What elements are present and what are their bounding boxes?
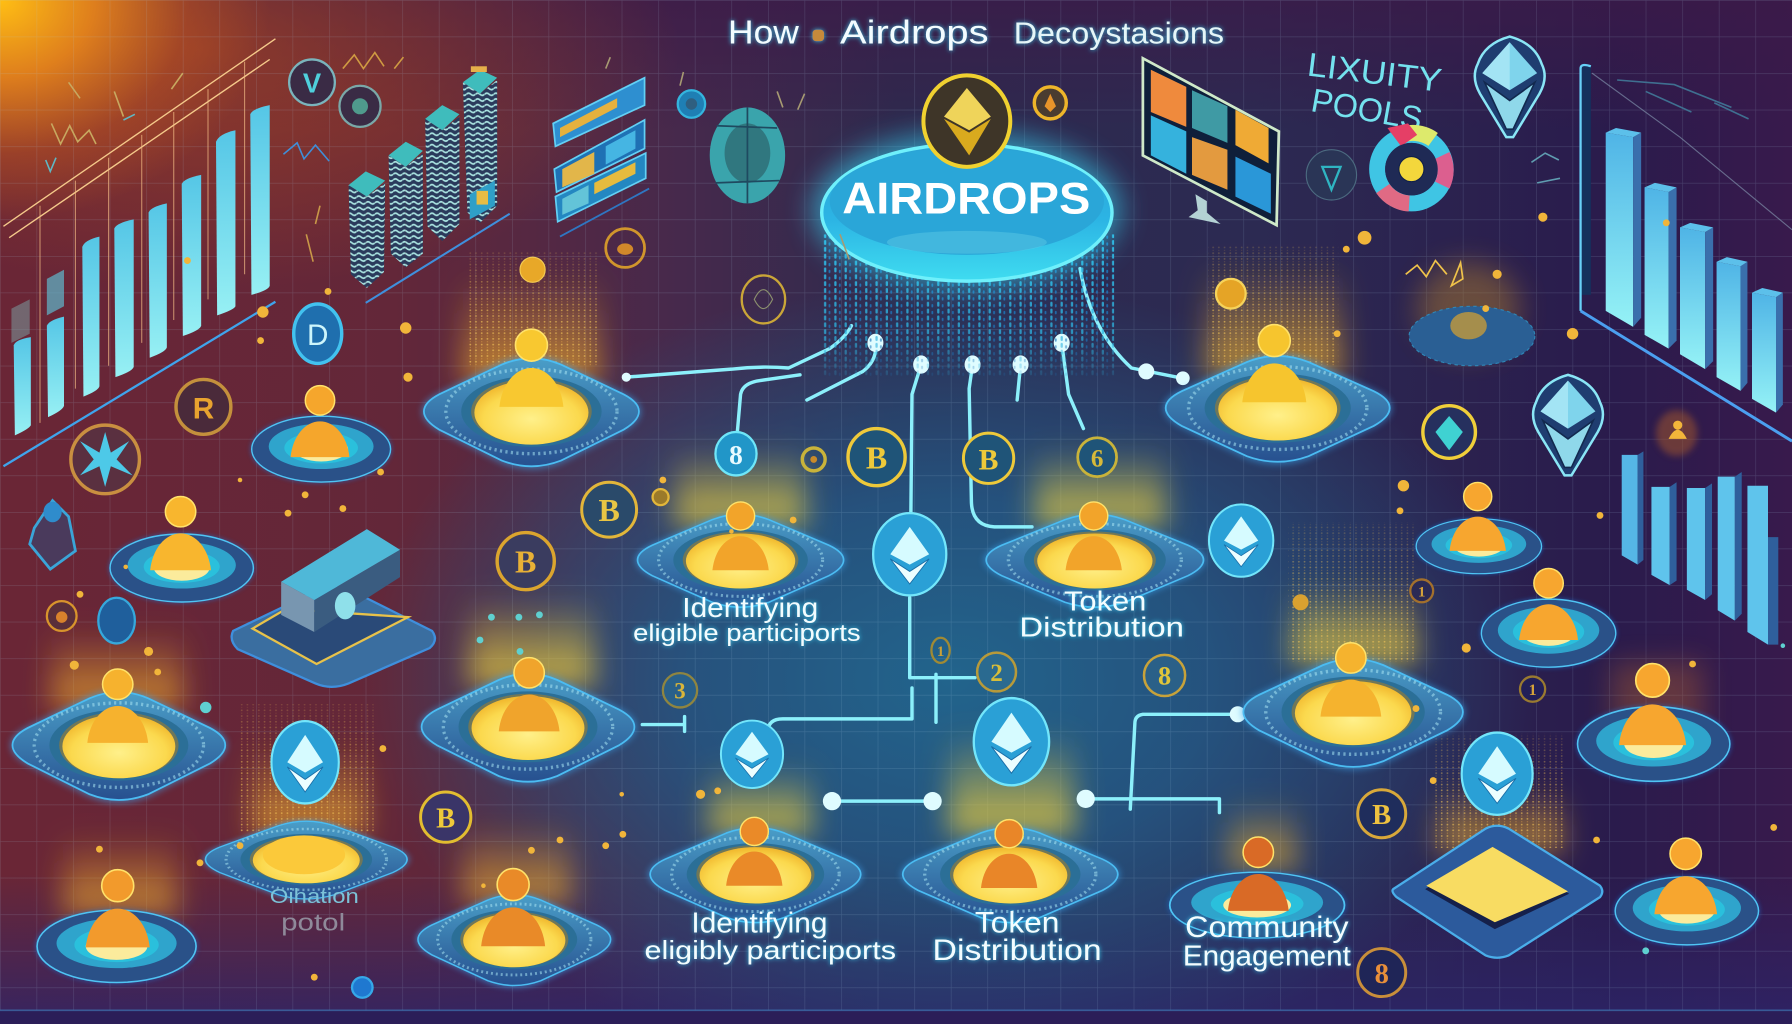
coin: star badge xyxy=(71,425,139,494)
ring pad xyxy=(1415,482,1543,575)
coin xyxy=(1410,579,1433,602)
label: token distribution upper: Distribution xyxy=(1019,612,1184,643)
label: token distribution upper: Token xyxy=(1064,585,1146,616)
coin: ring v xyxy=(289,59,335,105)
coin small: 1 xyxy=(937,644,944,660)
coin: B xyxy=(436,803,455,834)
ring pad xyxy=(250,386,392,483)
coin: ring flower xyxy=(339,86,381,127)
gem xyxy=(873,513,946,595)
coin: hollow 2 xyxy=(742,275,785,323)
label: identifying eligible participants upper: eligible particiports xyxy=(633,620,861,647)
bar chart: right falling bars xyxy=(1581,65,1792,441)
participant pad 2 xyxy=(1163,325,1392,465)
gem tokens xyxy=(271,504,1533,815)
participant pad xyxy=(1241,643,1465,770)
label: community engagement: Community xyxy=(1185,911,1349,944)
label: oihation pool: Oihation xyxy=(270,885,359,908)
pad: gold square xyxy=(1392,826,1602,958)
coin small xyxy=(653,489,669,505)
coin xyxy=(1358,790,1406,838)
coin: hollow xyxy=(606,229,645,267)
coin: P: R xyxy=(193,392,214,425)
coins top xyxy=(289,59,1066,323)
disc title: AIRDROPS xyxy=(842,175,1090,224)
gold coin in curtain right xyxy=(1216,279,1246,309)
label: community engagement xyxy=(1183,911,1351,973)
title: Decoystasions xyxy=(1014,15,1224,50)
label: oihation pool xyxy=(270,885,359,936)
coin 8 xyxy=(1144,655,1185,696)
participant pad: identifying xyxy=(635,502,846,610)
ring pad xyxy=(416,869,613,988)
icon: dim token xyxy=(1306,150,1357,200)
coin xyxy=(497,533,554,590)
title xyxy=(728,14,1224,51)
coin: B xyxy=(979,445,998,477)
coin 2: 2 xyxy=(990,660,1003,687)
label: identifying eligible participants lower xyxy=(645,908,896,965)
icon: gold token xyxy=(923,75,1010,167)
icon: colour wheel xyxy=(1377,123,1446,203)
bottom line xyxy=(0,1009,1792,1011)
coin xyxy=(421,792,471,842)
gem xyxy=(974,698,1049,785)
shield token right xyxy=(1533,375,1603,475)
participant pad xyxy=(10,669,227,803)
label: token distribution lower: Distribution xyxy=(933,934,1102,967)
icon: monitor with tiles xyxy=(1143,58,1279,225)
icon: shield token top right xyxy=(1475,37,1545,137)
data rain under disc xyxy=(821,234,1114,377)
coin small xyxy=(931,638,950,663)
label: identifying eligible participants lower: Identifying xyxy=(691,908,827,940)
coin: 6 xyxy=(1091,445,1103,472)
coin 3: 3 xyxy=(674,678,686,703)
ripple pad right xyxy=(1406,261,1535,366)
coin 1 xyxy=(1520,677,1545,702)
ring pad xyxy=(1576,664,1731,783)
coin: blue D token xyxy=(294,304,342,363)
icon: teal token wheel xyxy=(710,107,785,203)
coin: B xyxy=(515,544,536,580)
title: How xyxy=(728,14,799,51)
coin: ring v: V xyxy=(303,68,322,99)
coin xyxy=(582,482,637,537)
blue dot xyxy=(352,977,373,998)
pad: oihation pool xyxy=(203,820,409,901)
coin: P xyxy=(176,379,231,434)
ring pad xyxy=(1614,838,1760,946)
coin: B xyxy=(866,440,887,476)
participant pad 1 xyxy=(422,329,641,469)
label: identifying eligible participants upper xyxy=(633,592,861,647)
participant pad: token xyxy=(984,502,1206,610)
teal sparks xyxy=(200,611,1785,954)
label: token distribution upper xyxy=(1019,585,1184,643)
ring pad: community xyxy=(1168,837,1346,939)
small gold icon right xyxy=(1669,421,1687,439)
ring pad xyxy=(109,496,255,603)
hero: airdrops disc xyxy=(813,75,1121,377)
stacked coin towers xyxy=(349,66,510,303)
label: token distribution lower: Token xyxy=(975,907,1059,940)
bar chart: left rising bars xyxy=(3,39,275,466)
gem xyxy=(1209,504,1273,577)
coin: B xyxy=(598,492,620,528)
label: token distribution lower xyxy=(933,907,1102,967)
label: liquidity pools xyxy=(1305,47,1444,138)
coin: B xyxy=(1372,800,1391,831)
central connector lines xyxy=(626,269,1238,813)
coin small xyxy=(802,448,825,471)
panel: ambient glow columns xyxy=(51,263,1703,914)
gold sparks xyxy=(70,213,1777,981)
gem xyxy=(721,721,783,788)
coin small orange xyxy=(47,601,77,631)
data curtains xyxy=(239,246,1566,848)
title: Airdrops xyxy=(840,14,989,51)
bar chart: lower right bars xyxy=(1622,451,1778,645)
label: oihation pool: potol xyxy=(281,909,345,936)
ring pad xyxy=(35,870,198,984)
gold coins with B xyxy=(47,257,1545,997)
icon: tilted data cards xyxy=(553,78,649,237)
scribble details xyxy=(46,53,1749,262)
coin xyxy=(963,433,1014,483)
coin xyxy=(1358,949,1406,997)
participant pad: token lower xyxy=(901,820,1120,925)
label: liquidity pools: POOLS xyxy=(1308,82,1425,138)
coin 1: 1 xyxy=(1529,682,1537,699)
connector nodes xyxy=(622,334,1246,810)
coin: 1 xyxy=(1418,585,1425,601)
coin: blue xyxy=(678,90,705,118)
label: liquidity pools: LIXUITY xyxy=(1305,47,1444,100)
pad: vault box xyxy=(232,529,435,687)
label: identifying eligible participants upper: Identifying xyxy=(682,592,818,623)
coin 3 xyxy=(663,673,697,707)
gem xyxy=(271,721,339,803)
blue crystal xyxy=(30,501,75,569)
coin: gold xyxy=(1034,87,1066,119)
participant pad xyxy=(419,658,637,785)
coin: 8 xyxy=(1375,959,1389,990)
coin blue xyxy=(715,432,757,475)
coin 8: 8 xyxy=(1158,662,1171,691)
gold coin xyxy=(1293,594,1309,610)
coin: blue D token: D xyxy=(307,319,328,352)
coin xyxy=(1078,438,1117,477)
gold coin in curtain xyxy=(520,257,545,282)
ring pad xyxy=(1480,569,1617,669)
label: identifying eligible participants lower: eligibly particiports xyxy=(645,935,896,965)
label: community engagement: Engagement xyxy=(1183,941,1351,973)
coin xyxy=(848,429,905,486)
gem xyxy=(1462,733,1533,815)
coin 2 xyxy=(977,653,1016,691)
participant pad: identifying lower xyxy=(648,817,863,925)
coin: teal badge xyxy=(1423,406,1475,458)
blue token small xyxy=(98,598,135,643)
coin blue: 8 xyxy=(729,440,743,470)
